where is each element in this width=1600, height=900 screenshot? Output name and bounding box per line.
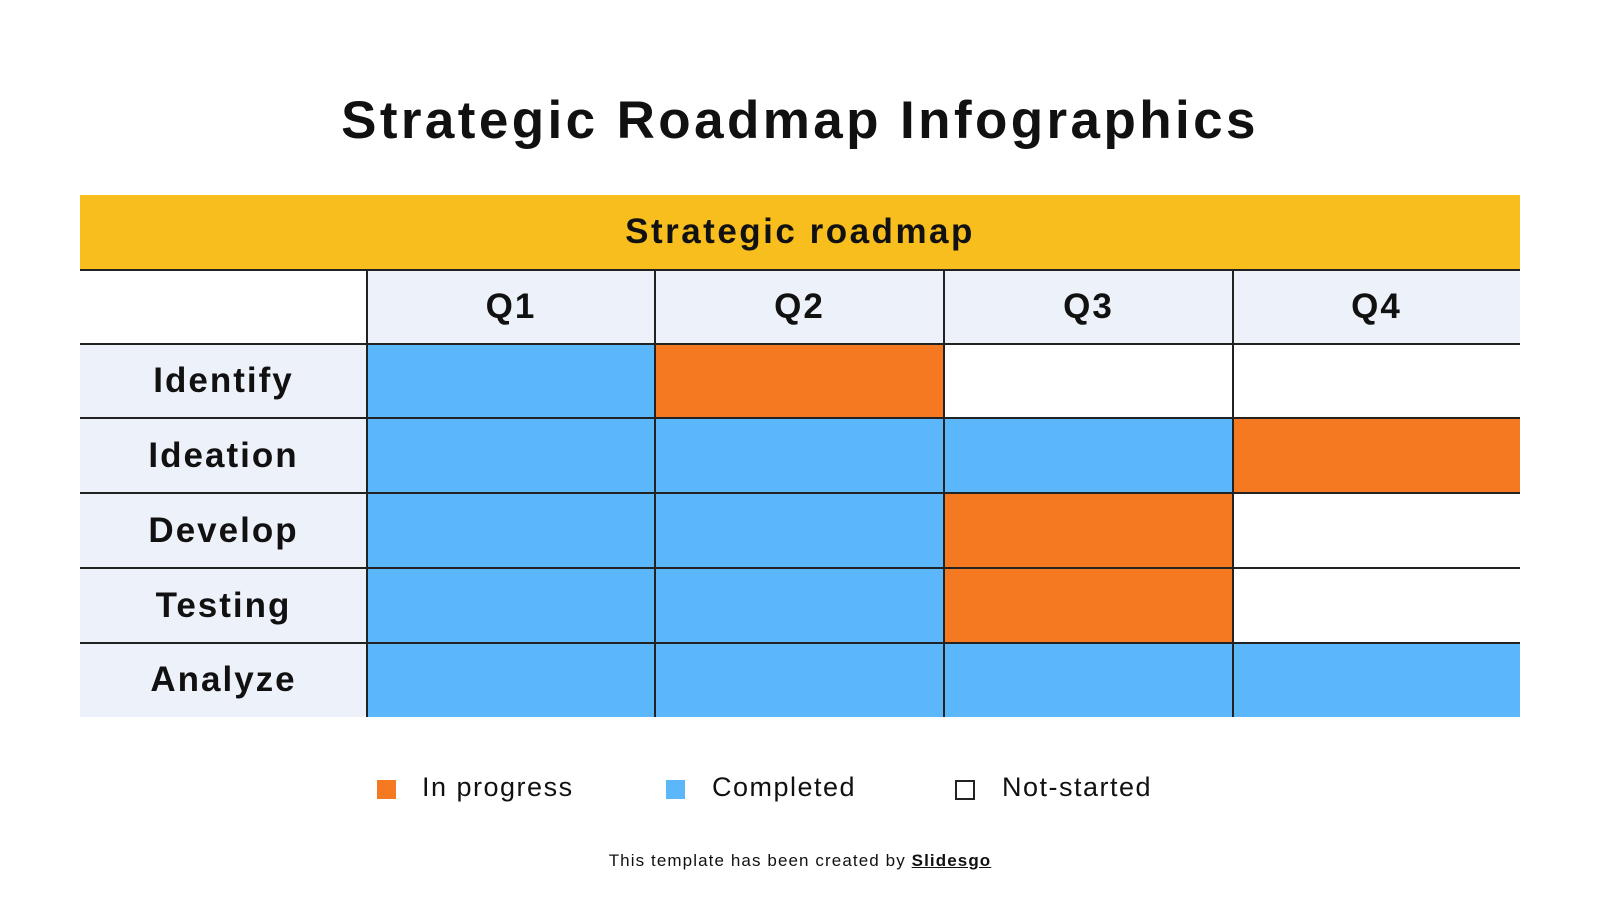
row labels — [80, 345, 366, 717]
legend: not started: Not-started — [1002, 772, 1152, 802]
table header band — [80, 195, 1520, 269]
row labels: Testing — [156, 586, 291, 624]
row labels: Identify — [153, 361, 294, 400]
legend: in progress: In progress — [422, 772, 574, 802]
legend — [377, 772, 1152, 802]
quarter headers: Q3 — [1063, 286, 1114, 326]
row labels: Analyze — [150, 660, 297, 699]
table header band: Strategic roadmap — [625, 212, 975, 251]
title: Strategic Roadmap Infographics — [341, 90, 1259, 150]
row labels: Ideation — [148, 436, 299, 474]
quarter headers — [368, 271, 1520, 343]
quarter headers: Q2 — [774, 286, 825, 326]
quarter headers: Q4 — [1351, 286, 1402, 326]
row labels: Develop — [148, 510, 299, 550]
legend: completed: Completed — [712, 772, 856, 802]
table: roadmap — [80, 195, 1520, 717]
footer credit: This template has been created by Slidesgo — [609, 851, 991, 870]
status cells — [368, 345, 1520, 717]
quarter headers: Q1 — [486, 286, 536, 326]
